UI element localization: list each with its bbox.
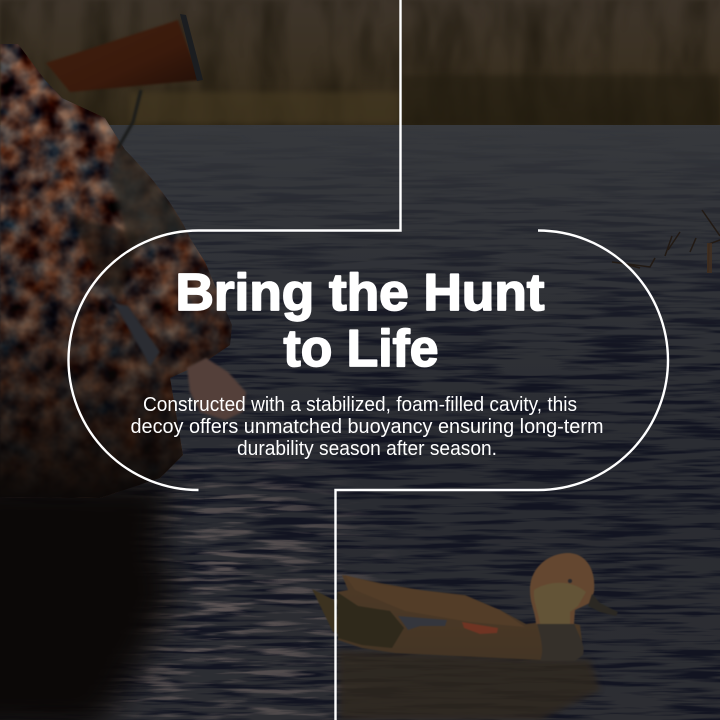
heading: to Life: [284, 320, 438, 378]
duck bill: [588, 594, 618, 616]
gun stock: [46, 20, 200, 92]
duck reflection: [338, 650, 600, 720]
duck body: [337, 575, 583, 660]
heading: Bring the Hunt: [176, 264, 544, 322]
hand: [187, 358, 246, 420]
body text: decoy offers unmatched buoyancy ensuring long-term: [130, 416, 604, 438]
sleeve gap showing water: [114, 303, 160, 366]
body text: Constructed with a stabilized, foam-filled cavity, this: [143, 394, 577, 416]
frame lower-right segment: [336, 230, 668, 720]
hunter reflection in dark water: [0, 480, 175, 720]
duck wing: [345, 575, 525, 627]
duck neck and chest: [537, 623, 584, 661]
hunter in camouflage: [0, 14, 246, 500]
duck head: [530, 553, 594, 624]
duck eye: [568, 579, 572, 583]
duck red speculum: [462, 622, 498, 634]
decoy duck: [312, 553, 618, 720]
reed bank: [0, 0, 720, 126]
body text: [130, 394, 604, 460]
gun butt plate: [180, 14, 203, 81]
duck dark rump: [337, 592, 404, 648]
duck tail: [312, 589, 340, 634]
heading: [176, 264, 544, 378]
body text: durability season after season.: [237, 438, 497, 460]
marsh twigs: [612, 210, 720, 272]
duck cheek: [534, 583, 586, 624]
sling strap: [118, 90, 141, 148]
duck wing gap: [398, 616, 447, 630]
frame upper-left segment: [68, 0, 400, 490]
